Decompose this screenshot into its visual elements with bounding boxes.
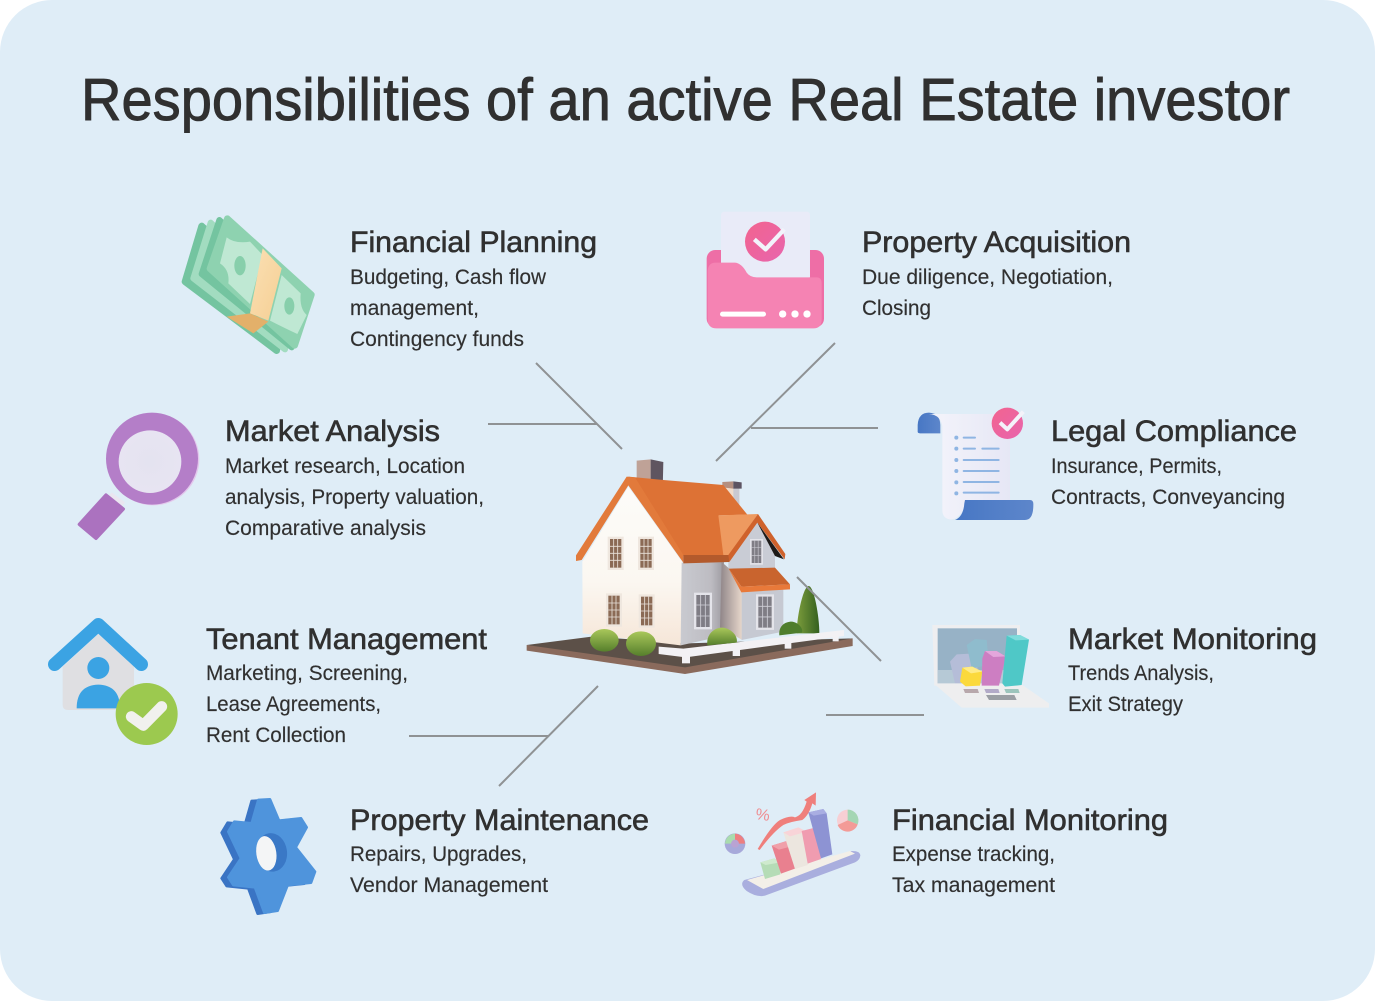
lower side wall [742,588,783,640]
icon: folder with check [707,212,824,328]
panel: financial monitoring [725,792,1168,897]
dormer shadow [757,523,784,559]
connector: financial planning and market analysis [488,363,622,449]
description [206,662,408,747]
windows [606,537,774,630]
bushes [590,622,802,656]
description: Contracts, Conveyancing [1051,486,1285,509]
heading: Property Maintenance [350,804,649,837]
heading: Financial Monitoring [892,804,1168,837]
description [892,843,1055,897]
connector: property acquisition and legal compliance [716,343,878,461]
main roof [628,477,747,556]
title: Responsibilities of an active Real Estate investor [81,67,1290,133]
ground base [527,637,853,674]
side wall [681,562,724,645]
description: Tax management [892,874,1055,897]
description [225,455,484,540]
heading: Tenant Management [206,623,488,656]
icon: phone with chart [725,792,860,896]
front wall [582,487,683,645]
description: Market research, Location [225,455,465,478]
description: Closing [862,297,931,320]
description: Comparative analysis [225,517,426,540]
description: Contingency funds [350,328,524,351]
description [862,266,1113,320]
description: Marketing, Screening, [206,662,408,685]
front fascia [683,555,729,563]
description: Insurance, Permits, [1051,455,1222,478]
panel: tenant management [55,623,488,747]
description: Repairs, Upgrades, [350,843,527,866]
connector: tenant management and property maintenance [409,686,598,786]
chimney [637,459,663,490]
tree [797,586,819,633]
icon: phone with chart: % [754,806,771,825]
panel: property acquisition [707,212,1131,328]
fence [659,630,844,663]
description: Trends Analysis, [1068,662,1214,685]
heading: Market Monitoring [1068,623,1317,656]
panel: property maintenance [222,799,649,914]
bay wall [720,562,742,640]
description: Rent Collection [206,724,346,747]
panel: legal compliance [918,408,1297,520]
icon: scroll with check [918,408,1033,520]
panel: market monitoring [932,623,1317,716]
dormer rake [728,514,785,562]
dormer wall [728,522,775,569]
description [350,266,547,351]
description: Lease Agreements, [206,693,381,716]
icon: house with tenant and check [55,625,178,745]
small chimney [722,481,742,505]
connector: market monitoring and financial monitoring (horizontal) [826,714,924,716]
icon: magnifying glass [79,413,199,538]
description: Exit Strategy [1068,693,1183,716]
description: Budgeting, Cash flow [350,266,547,289]
panel: market analysis [79,413,484,540]
heading: Market Analysis [225,415,440,448]
description: analysis, Property valuation, [225,486,484,509]
description: Due diligence, Negotiation, [862,266,1113,289]
heading: Property Acquisition [862,226,1131,259]
description: Expense tracking, [892,843,1055,866]
icon: laptop with bars [932,625,1049,708]
description [1051,455,1285,509]
description: management, [350,297,479,320]
central house illustration [527,459,853,674]
heading: Legal Compliance [1051,415,1297,448]
description [1068,662,1214,716]
porch roof [729,568,790,592]
left rake [576,477,683,563]
panel: financial planning [185,219,597,351]
heading: Financial Planning [350,226,597,259]
description [350,843,548,897]
icon: gear [222,799,315,914]
icon: stack of money [185,219,311,351]
description: Vendor Management [350,874,548,897]
connector: market monitoring (diagonal over house) [797,577,881,661]
dormer roof [718,514,758,555]
